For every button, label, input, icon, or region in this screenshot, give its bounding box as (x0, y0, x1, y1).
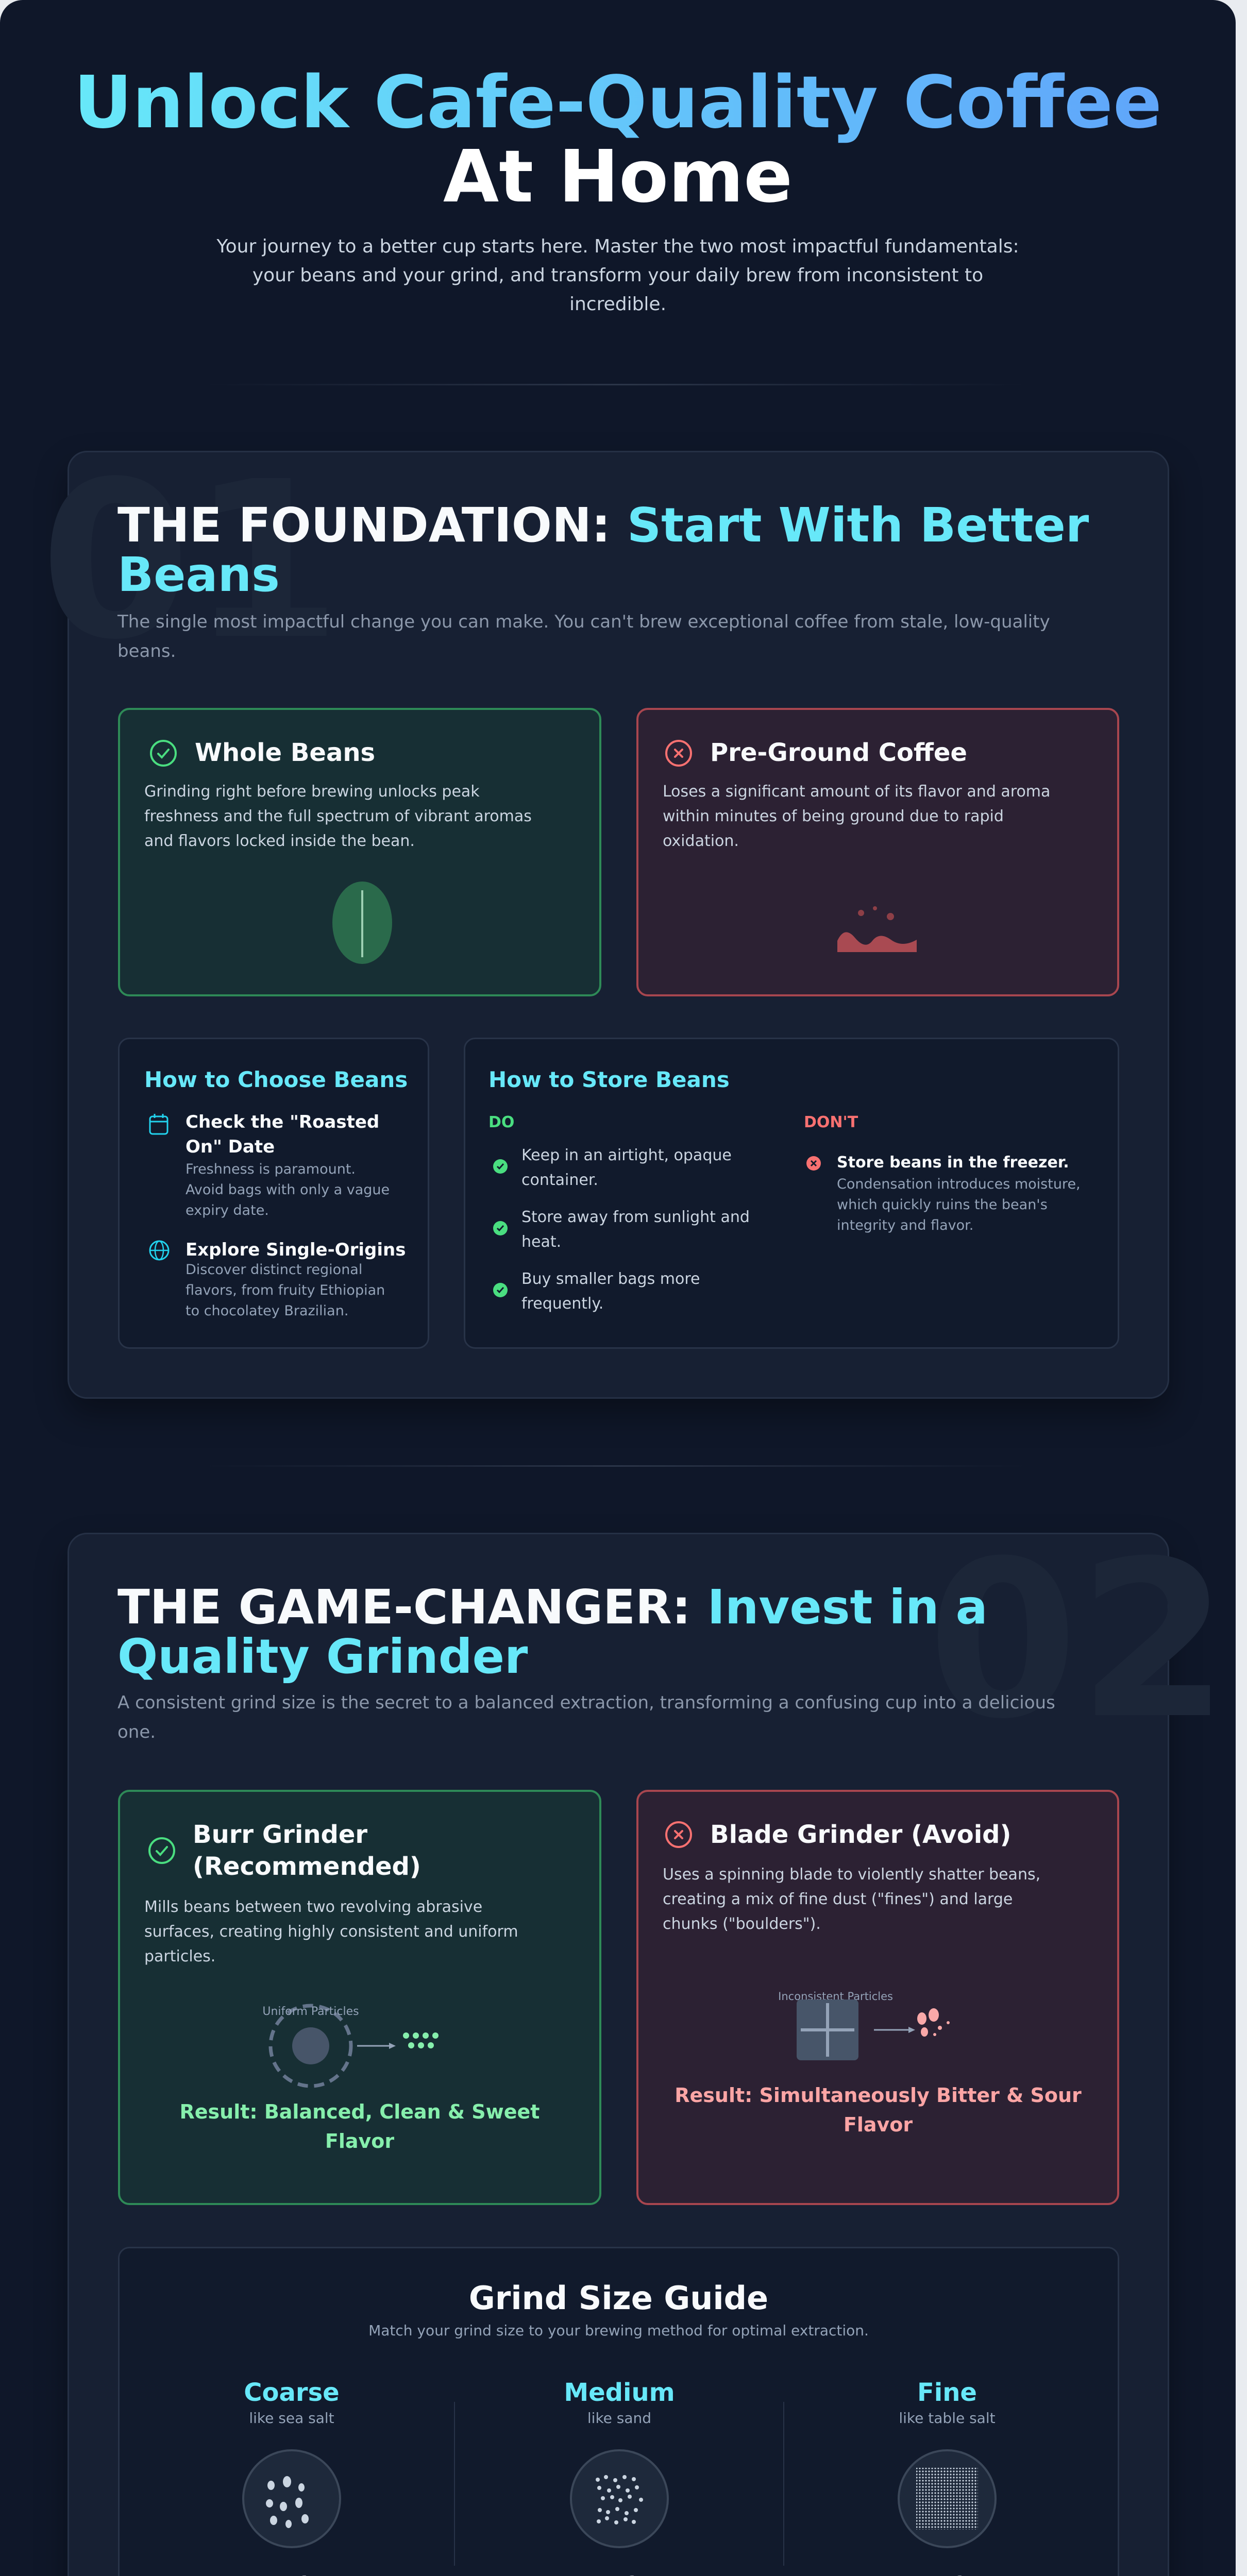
store heading: How to Store Beans (488, 1067, 730, 1092)
column: medium: Medium (564, 2378, 675, 2407)
section 1 description (117, 612, 1050, 662)
icon: calendar (149, 1114, 168, 1134)
title (74, 61, 1162, 219)
subtitle: Your journey to a better cup starts here. Master the two most impactful fundamentals: (216, 236, 1019, 257)
blade result: Flavor (844, 2113, 913, 2136)
dont column: integrity and flavor. (837, 1217, 973, 1233)
column: coarse: Coarse (244, 2378, 340, 2407)
guide subtitle: Match your grind size to your brewing method for optimal extraction. (368, 2322, 869, 2339)
item: roasted on date: Freshness is paramount. (186, 1161, 356, 1177)
whole beans text: freshness and the full spectrum of vibrant aromas (144, 807, 532, 825)
card: how to store beans (464, 1038, 1119, 1349)
blade result: Result: Simultaneously Bitter & Sour (675, 2084, 1082, 2107)
item: roasted on date: On" Date (186, 1137, 275, 1157)
icon: check circle (150, 740, 177, 767)
panel: section 2 grinder (68, 1533, 1169, 2576)
icon: check circle (148, 1837, 175, 1864)
burr result: Result: Balanced, Clean & Sweet (179, 2100, 540, 2123)
blade text: chunks ("boulders"). (663, 1915, 821, 1933)
subtitle: incredible. (569, 294, 666, 315)
blade text: creating a mix of fine dust ("fines") and large (663, 1890, 1013, 1908)
pre-ground text (663, 783, 1050, 850)
illustration: blade inconsistent particles: Inconsistent Particles (778, 1990, 893, 2003)
big number 02: 02 (928, 1515, 1228, 1767)
do column: Keep in an airtight, opaque (521, 1146, 732, 1164)
column: fine: Fine (917, 2378, 977, 2407)
subtitle: your beans and your grind, and transform your daily brew from inconsistent to (252, 265, 983, 286)
section 1 description: The single most impactful change you can make. You can't brew exceptional coffee from stale, low-quality (117, 612, 1050, 632)
section 2 description: A consistent grind size is the secret to a balanced extraction, transforming a confusing cup into a delicious (117, 1692, 1055, 1713)
pre-ground text: oxidation. (663, 832, 739, 850)
burr result (179, 2100, 540, 2153)
column: medium: like sand (587, 2410, 651, 2427)
whole beans text: Grinding right before brewing unlocks peak (144, 783, 480, 801)
icon: x circle (665, 1821, 692, 1848)
heading: section 1: THE FOUNDATION: Start With Better (117, 498, 1089, 553)
blade result (638, 2081, 1118, 2140)
title: Unlock Cafe-Quality Coffee (74, 61, 1162, 145)
dont column: Condensation introduces moisture, (837, 1176, 1081, 1192)
pre-ground text: within minutes of being ground due to rapid (663, 807, 1004, 825)
whole beans title: Whole Beans (195, 738, 375, 767)
column: medium (465, 2377, 774, 2576)
pre-ground title: Pre-Ground Coffee (710, 738, 967, 767)
item: roasted on date: Check the "Roasted (186, 1112, 379, 1132)
item: single origins: to chocolatey Brazilian. (186, 1303, 348, 1319)
do column (488, 1113, 750, 1313)
item: roasted on date: Avoid bags with only a vague (186, 1182, 390, 1198)
do column: heat. (521, 1233, 561, 1251)
pre-ground text: Loses a significant amount of its flavor and aroma (663, 783, 1050, 801)
dont column: Store beans in the freezer. (837, 1154, 1069, 1172)
icon: ground coffee pile (837, 906, 917, 952)
item: single origins: Explore Single-Origins (186, 1240, 406, 1260)
item: roasted on date: expiry date. (186, 1202, 269, 1218)
column: coarse (137, 2377, 446, 2576)
dont column: DON'T (804, 1113, 858, 1131)
dont column: which quickly ruins the bean's (837, 1197, 1048, 1213)
illustration: blade inconsistent particles (778, 1990, 950, 2060)
panel: section 1 foundation (68, 451, 1169, 1399)
burr result: Flavor (325, 2130, 394, 2153)
burr title: Burr Grinder (193, 1820, 367, 1849)
section 2 description: one. (117, 1722, 156, 1742)
blade text (663, 1866, 1040, 1933)
burr text: Mills beans between two revolving abrasive (144, 1898, 482, 1916)
guide title: Grind Size Guide (469, 2279, 768, 2317)
blade title: Blade Grinder (Avoid) (710, 1820, 1011, 1849)
burr text: particles. (144, 1947, 215, 1965)
burr text: surfaces, creating highly consistent and uniform (144, 1923, 518, 1941)
whole beans text (144, 783, 532, 850)
item: single origins: flavors, from fruity Ethiopian (186, 1282, 385, 1298)
panel: grind size guide (118, 2247, 1119, 2576)
heading: section 2 (117, 1580, 988, 1684)
section 2 description (117, 1692, 1055, 1742)
whole beans text: and flavors locked inside the bean. (144, 832, 415, 850)
icon: coffee bean (332, 882, 392, 964)
column: coarse: like sea salt (249, 2410, 334, 2427)
column: fine (793, 2377, 1102, 2576)
burr text (144, 1898, 518, 1965)
item: roasted on date (186, 1112, 390, 1218)
card: blade grinder (636, 1790, 1119, 2205)
card: burr grinder (118, 1790, 601, 2205)
heading: section 2: THE GAME-CHANGER: Invest in a (117, 1580, 988, 1635)
card: whole beans (118, 708, 601, 996)
heading: section 1: Beans (117, 547, 280, 602)
subtitle (216, 236, 1019, 315)
item: single origins: Discover distinct regional (186, 1262, 362, 1278)
big number 01: 01 (40, 435, 341, 687)
do column: DO (488, 1113, 514, 1131)
do column: Buy smaller bags more (521, 1270, 700, 1288)
item: single origins (186, 1240, 406, 1319)
dont column (804, 1113, 1081, 1233)
heading: section 2: Quality Grinder (117, 1629, 528, 1684)
illustration: burr uniform particles (262, 2004, 439, 2088)
icon: x circle (665, 740, 692, 767)
column: fine: like table salt (899, 2410, 996, 2427)
do column: Store away from sunlight and (521, 1208, 750, 1226)
burr title (193, 1820, 421, 1881)
card: how to choose beans (118, 1038, 429, 1349)
blade text: Uses a spinning blade to violently shatter beans, (663, 1866, 1040, 1884)
do column: frequently. (521, 1295, 603, 1313)
choose heading: How to Choose Beans (144, 1067, 408, 1092)
heading: section 1 (117, 498, 1089, 602)
section 1 description: beans. (117, 641, 176, 662)
burr title: (Recommended) (193, 1852, 421, 1881)
icon: globe (149, 1241, 169, 1260)
do column: container. (521, 1171, 598, 1189)
title: At Home (443, 135, 793, 219)
illustration: burr uniform particles: Uniform Particles (262, 2005, 359, 2018)
card: pre-ground coffee (636, 708, 1119, 996)
